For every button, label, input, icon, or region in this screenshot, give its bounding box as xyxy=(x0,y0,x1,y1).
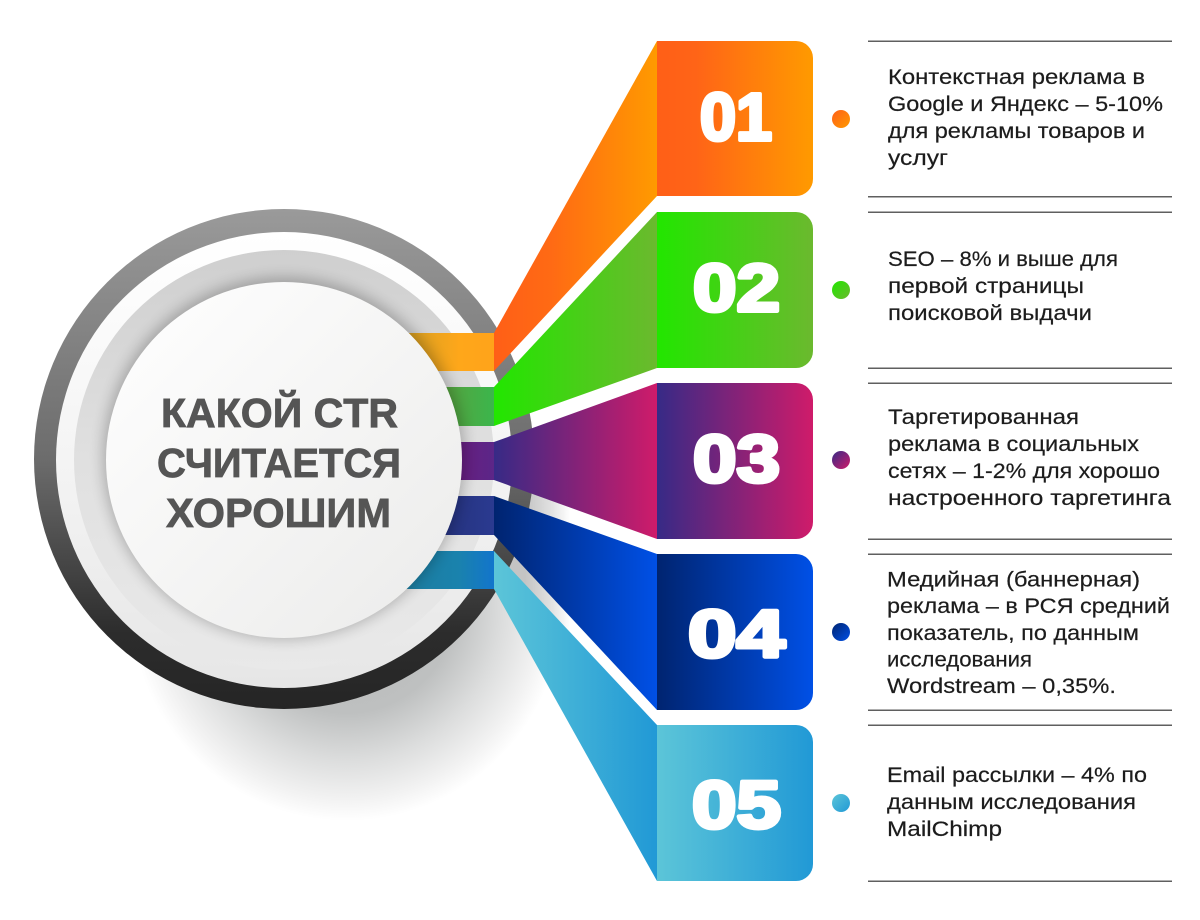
text: item 03: сетях – 1-2% для хорошо xyxy=(888,459,1160,483)
title: СЧИТАЕТСЯ xyxy=(157,440,401,486)
text: item 05: MailChimp xyxy=(887,817,1002,841)
text: item 04: реклама – в РСЯ средний xyxy=(887,594,1170,618)
item 04 xyxy=(494,496,813,710)
item 02: 02 xyxy=(693,251,780,326)
item 01 xyxy=(494,41,813,371)
text: item 04: Wordstream – 0,35%. xyxy=(887,674,1116,698)
text: item 02: поисковой выдачи xyxy=(888,301,1092,325)
text: item 01: Google и Яндекс – 5-10% xyxy=(888,92,1163,116)
text: item 01: для рекламы товаров и xyxy=(888,119,1145,143)
text frame rules xyxy=(868,40,1172,882)
drop shadow under circle xyxy=(131,389,570,821)
text: item 02: первой страницы xyxy=(888,274,1084,298)
item 05: 05 xyxy=(692,768,781,843)
item 05 xyxy=(494,551,813,881)
text: item 04: показатель, по данным xyxy=(887,621,1139,645)
text: item 03: Таргетированная xyxy=(888,405,1079,429)
item 03: 03 xyxy=(693,422,780,497)
text: item 02 xyxy=(888,247,1118,325)
text: item 05: Email рассылки – 4% по xyxy=(887,763,1147,787)
text: item 02: SEO – 8% и выше для xyxy=(888,247,1118,271)
item 02 xyxy=(494,212,813,426)
item 04: 04 xyxy=(688,597,785,672)
text: item 05: данным исследования xyxy=(887,790,1136,814)
central circle rings xyxy=(34,209,534,709)
text: item 03 xyxy=(888,405,1171,510)
title xyxy=(157,390,401,536)
text: item 05 xyxy=(887,763,1147,841)
central disc with title xyxy=(103,277,465,639)
text: item 01: услуг xyxy=(888,146,948,170)
item 03 xyxy=(494,383,813,539)
text: item 01 xyxy=(888,65,1163,170)
text: item 03: реклама в социальных xyxy=(888,432,1139,456)
text: item 04: Медийная (баннерная) xyxy=(887,568,1140,592)
item 01: 01 xyxy=(700,80,772,155)
text: item 03: настроенного таргетинга xyxy=(888,486,1171,510)
bullet dots xyxy=(832,110,850,812)
title: КАКОЙ CTR xyxy=(161,390,398,436)
text: item 01: Контекстная реклама в xyxy=(888,65,1145,89)
title: ХОРОШИМ xyxy=(166,490,391,536)
connector stripes behind the central disc xyxy=(380,333,494,589)
text: item 04: исследования xyxy=(887,648,1032,672)
text: item 04 xyxy=(887,568,1170,698)
